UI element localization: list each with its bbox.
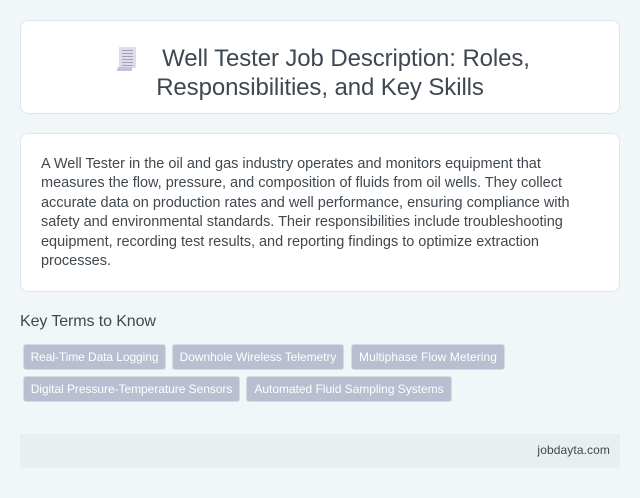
description text: safety and environmental standards. Their responsibilities include troubleshooting bbox=[41, 214, 563, 230]
description text: accurate data on production rates and well performance, ensuring compliance with bbox=[41, 195, 570, 211]
icon: document scroll bbox=[117, 47, 136, 71]
description text: processes. bbox=[41, 253, 111, 269]
tag bbox=[351, 344, 505, 370]
footer bar bbox=[20, 434, 620, 468]
tag: Automated Fluid Sampling Systems bbox=[254, 382, 444, 396]
panel: title card bbox=[20, 20, 620, 114]
tag: Real-Time Data Logging bbox=[31, 350, 158, 364]
title heading bbox=[156, 45, 530, 101]
tag bbox=[246, 376, 452, 402]
tag: Downhole Wireless Telemetry bbox=[180, 350, 336, 364]
description text bbox=[41, 156, 570, 269]
tag bbox=[23, 344, 166, 370]
footer source text: jobdayta.com bbox=[537, 443, 610, 457]
description text: equipment, recording test results, and reporting findings to optimize extraction bbox=[41, 234, 539, 250]
heading: key terms: Key Terms to Know bbox=[20, 313, 156, 330]
description text: A Well Tester in the oil and gas industry operates and monitors equipment that bbox=[41, 156, 541, 172]
tag: Multiphase Flow Metering bbox=[359, 350, 497, 364]
title heading: Well Tester Job Description: Roles, bbox=[162, 45, 530, 72]
tag bbox=[172, 344, 344, 370]
tag list bbox=[23, 344, 505, 402]
title heading: Responsibilities, and Key Skills bbox=[156, 74, 484, 101]
panel: description card bbox=[20, 133, 620, 292]
tag bbox=[23, 376, 240, 402]
tag: Digital Pressure-Temperature Sensors bbox=[31, 382, 232, 396]
description text: measures the flow, pressure, and composition of fluids from oil wells. They collect bbox=[41, 175, 562, 191]
